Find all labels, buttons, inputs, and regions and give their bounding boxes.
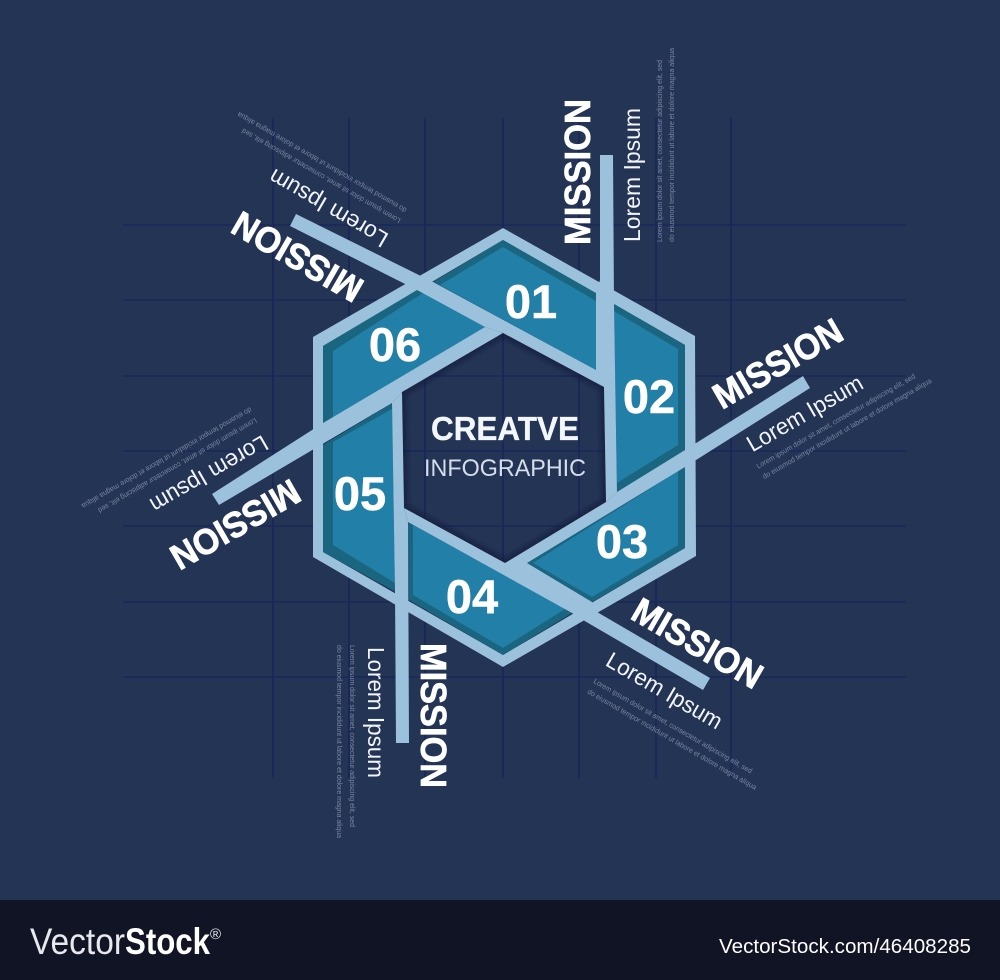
label group 01 top: MISSION bbox=[557, 99, 598, 245]
footer bar: Stock bbox=[125, 921, 210, 962]
center title: CREATVE bbox=[431, 410, 579, 447]
label group 05 lower left: do eiusmod tempor incididunt ut labore et dolore magna aliqua bbox=[79, 405, 254, 511]
label group 04 bottom: Lorem Ipsum bbox=[363, 647, 389, 778]
label group 02 right: Lorem Ipsum bbox=[742, 369, 867, 457]
label group 03 lower right: Lorem Ipsum bbox=[602, 647, 727, 734]
label group 04 bottom: Lorem ipsum dolor sit amet, consectetur adipiscing elit, sed bbox=[348, 645, 357, 827]
footer bar: ® bbox=[210, 926, 221, 943]
number 02: 02 bbox=[623, 370, 675, 423]
segment 03 bbox=[527, 467, 685, 602]
label group 05 lower left: MISSION bbox=[163, 471, 308, 578]
label group 06 upper left: MISSION bbox=[225, 203, 370, 311]
footer bar: Vector bbox=[30, 921, 125, 962]
label group 06 upper left bbox=[180, 110, 409, 311]
label group 06 upper left: Lorem ipsum dolor sit amet, consectetur adipiscing elit, sed bbox=[240, 126, 402, 225]
arrow bar 06 bbox=[290, 214, 604, 387]
label group 05 lower left: Lorem ipsum dolor sit amet, consectetur adipiscing elit, sed bbox=[97, 416, 259, 515]
center subtitle: INFOGRAPHIC bbox=[424, 455, 586, 482]
label group 02 right bbox=[706, 283, 934, 482]
number 01: 01 bbox=[505, 275, 557, 328]
number 05: 05 bbox=[334, 467, 386, 520]
footer bar bbox=[0, 900, 1000, 980]
segment 02 bbox=[614, 304, 685, 492]
arrow bar 03 bbox=[404, 508, 710, 690]
label group 01 top: Lorem ipsum dolor sit amet, consectetur adipiscing elit, sed bbox=[655, 60, 664, 242]
label group 02 right: Lorem ipsum dolor sit amet, consectetur adipiscing elit, sed bbox=[755, 372, 917, 470]
label group 06 upper left: Lorem Ipsum bbox=[264, 164, 392, 253]
label group 04 bottom bbox=[335, 643, 454, 839]
segment 01 bbox=[433, 240, 596, 370]
label group 04 bottom: MISSION bbox=[413, 643, 454, 788]
label group 04 bottom: do eiusmod tempor incididunt ut labore et dolore magna aliqua bbox=[335, 645, 344, 839]
label group 02 right: do eiusmod tempor incididunt ut labore et dolore magna aliqua bbox=[761, 376, 934, 481]
label group 03 lower right: do eiusmod tempor incididunt ut labore et dolore magna aliqua bbox=[586, 687, 759, 792]
segment 06 bbox=[323, 290, 485, 423]
arrow bar 05 bbox=[212, 327, 503, 505]
label group 03 lower right: MISSION bbox=[625, 589, 770, 697]
label group 02 right: MISSION bbox=[706, 310, 850, 417]
label group 01 top: do eiusmod tempor incididunt ut labore et dolore magna aliqua bbox=[667, 47, 676, 242]
number 06: 06 bbox=[369, 318, 421, 371]
footer bar: VectorStock.com/46408285 bbox=[719, 936, 971, 958]
label group 05 lower left bbox=[79, 405, 308, 604]
label group 05 lower left: Lorem Ipsum bbox=[146, 430, 273, 519]
inner hexagon shadow bbox=[402, 333, 606, 563]
number 04: 04 bbox=[446, 570, 498, 623]
hexagon outer ring bbox=[313, 228, 696, 667]
arrow bar 04 bbox=[392, 392, 409, 743]
label group 03 lower right: Lorem ipsum dolor sit amet, consectetur adipiscing elit, sed bbox=[592, 677, 754, 775]
segment 05 bbox=[323, 403, 396, 592]
segment 04 bbox=[408, 522, 572, 655]
number 03: 03 bbox=[596, 515, 648, 568]
label group 01 top: Lorem Ipsum bbox=[619, 108, 645, 242]
label group 01 top bbox=[557, 47, 676, 245]
label group 03 lower right bbox=[585, 589, 815, 792]
arrow bar 01 bbox=[596, 155, 617, 502]
label group 06 upper left: do eiusmod tempor incididunt ut labore et dolore magna aliqua bbox=[235, 110, 408, 215]
arrow bar 02 bbox=[505, 376, 810, 563]
center title bbox=[424, 410, 586, 482]
